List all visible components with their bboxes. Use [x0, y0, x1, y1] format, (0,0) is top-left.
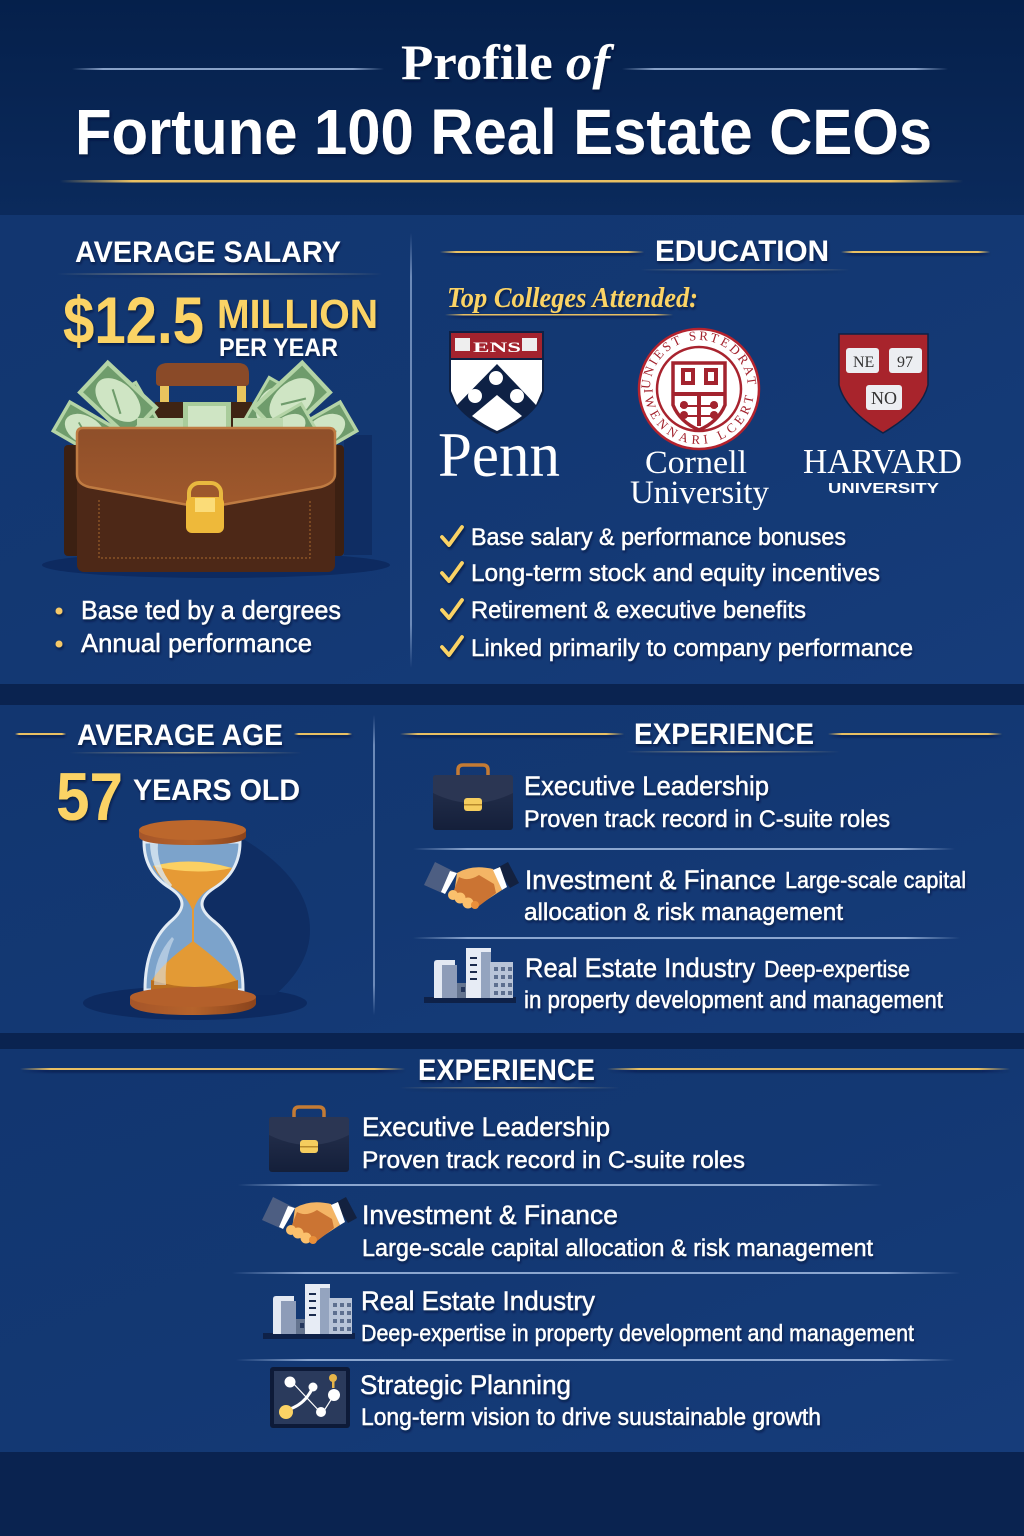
- panel: salary and education: [0, 215, 1024, 684]
- text: investment and finance: allocation & risk management: [524, 899, 843, 926]
- logo: Harvard: NE: [853, 354, 874, 371]
- logo: Penn: Penn: [438, 420, 560, 490]
- text: investment and finance: [524, 865, 966, 926]
- text: investment and finance: [362, 1200, 873, 1262]
- text: investment and finance: Large-scale capital allocation & risk management: [362, 1235, 873, 1262]
- subheading: top colleges: Top Colleges Attended:: [447, 282, 698, 314]
- text: executive leadership: Proven track record in C-suite roles: [362, 1147, 745, 1174]
- list: compensation checks: Linked primarily to company performance: [471, 635, 913, 662]
- text: investment and finance: Investment & Finance: [525, 865, 776, 895]
- list: salary notes: [56, 595, 341, 658]
- icon: strategy board: [270, 1367, 350, 1428]
- age figure: [56, 759, 300, 835]
- list: compensation checks: Long-term stock and equity incentives: [471, 560, 880, 587]
- list: salary notes: Annual performance: [81, 628, 312, 658]
- gold title rule: [60, 180, 963, 182]
- logo: Harvard: NO: [871, 388, 897, 408]
- icon: leadership briefcase: [433, 765, 513, 830]
- salary figure: PER YEAR: [219, 334, 338, 362]
- title: Fortune 100 Real Estate CEOs: Fortune 100 Real Estate CEOs: [75, 96, 932, 168]
- text: real estate industry: Deep-expertise in property development and management: [361, 1320, 915, 1346]
- text: executive leadership: Executive Leadership: [362, 1112, 610, 1142]
- heading: experience (upper): EXPERIENCE: [634, 718, 814, 751]
- list: compensation checks: Retirement & executive benefits: [471, 597, 806, 624]
- salary figure: [63, 283, 378, 362]
- title: Profile of: Profile of: [401, 34, 615, 90]
- logo: Harvard: UNIVERSITY: [828, 480, 939, 497]
- logo: Cornell: University: [630, 475, 769, 511]
- heading: experience (lower): EXPERIENCE: [418, 1054, 595, 1087]
- icon: briefcase full of money: [42, 360, 390, 578]
- text: real estate industry: Deep-expertise: [764, 956, 910, 982]
- logo: Harvard: [803, 334, 962, 497]
- list: salary notes: Base ted by a dergrees: [81, 595, 341, 625]
- text: strategic planning: [360, 1370, 821, 1431]
- logo: Penn: ENS: [473, 340, 521, 356]
- text: executive leadership: [524, 771, 890, 833]
- icon: handshake: [424, 862, 519, 909]
- panel: experience: [0, 1049, 1024, 1452]
- salary figure: $12.5: [63, 283, 204, 357]
- heading: average age: AVERAGE AGE: [77, 719, 283, 752]
- logo: Harvard: 97: [897, 354, 913, 371]
- text: strategic planning: Long-term vision to drive suustainable growth: [361, 1404, 821, 1431]
- icon: hourglass: [83, 820, 310, 1020]
- logo: Harvard: HARVARD: [803, 442, 962, 481]
- text: investment and finance: Large-scale capital: [785, 867, 966, 893]
- age figure: YEARS OLD: [133, 774, 300, 807]
- text: executive leadership: [362, 1112, 745, 1174]
- logo: Penn: [438, 331, 560, 490]
- text: real estate industry: [524, 953, 943, 1014]
- icon: buildings: [263, 1284, 355, 1339]
- icon: buildings: [424, 948, 516, 1003]
- age figure: 57: [56, 759, 123, 835]
- text: real estate industry: in property development and management: [524, 987, 943, 1014]
- text: executive leadership: Proven track record in C-suite roles: [524, 806, 890, 833]
- text: real estate industry: Real Estate Industry: [361, 1286, 595, 1316]
- list: compensation checks: [442, 524, 913, 662]
- text: executive leadership: Executive Leadership: [524, 771, 769, 801]
- icon: handshake: [262, 1197, 357, 1244]
- logo: Cornell: [630, 328, 769, 511]
- text: investment and finance: Investment & Finance: [362, 1200, 618, 1230]
- panel: age and experience: [0, 705, 1024, 1033]
- text: strategic planning: Strategic Planning: [360, 1370, 571, 1400]
- header band: [0, 0, 1024, 215]
- logo: Cornell: IWENNARI LCERT: [644, 389, 754, 444]
- list: compensation checks: Base salary & performance bonuses: [471, 524, 846, 551]
- heading: average salary: AVERAGE SALARY: [75, 236, 341, 269]
- logo: Cornell: UNIEST SRTEDRAT: [641, 331, 756, 388]
- salary figure: MILLION: [217, 291, 378, 337]
- logo: Cornell: Cornell: [645, 445, 747, 481]
- text: real estate industry: [361, 1286, 915, 1346]
- heading: education: EDUCATION: [655, 235, 829, 268]
- icon: leadership briefcase: [269, 1107, 349, 1172]
- text: real estate industry: Real Estate Industry: [525, 953, 755, 983]
